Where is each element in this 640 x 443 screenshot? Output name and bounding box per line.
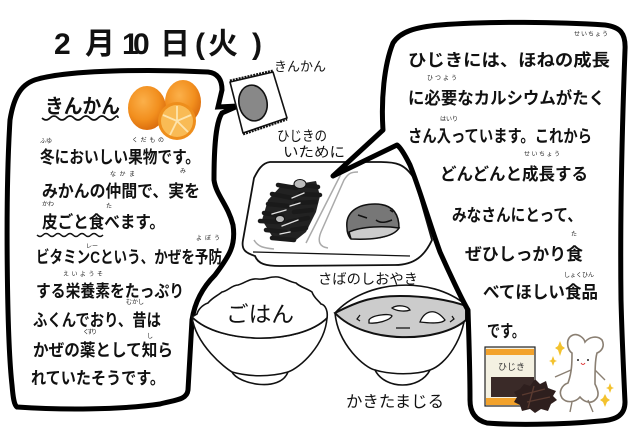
- body text: た: [106, 203, 112, 210]
- body text: せいちょう: [574, 31, 608, 38]
- body text: はいり: [440, 116, 458, 123]
- body text: くだもの: [132, 137, 164, 144]
- icon: sparkles: [549, 341, 614, 407]
- grilled mackerel: [347, 204, 399, 239]
- body text: むかし: [126, 299, 144, 306]
- body text: えいようそ: [63, 271, 103, 278]
- body text: かぜの薬として知ら: [33, 341, 173, 360]
- body text: ひじきには、ほねの成長: [408, 50, 610, 70]
- body text: ひつよう: [427, 75, 457, 82]
- body text: ぜひしっかり食: [465, 245, 583, 264]
- kumquat photo: [128, 80, 201, 140]
- tray: hijiki and grilled mackerel: [243, 162, 432, 266]
- body text: です。: [487, 322, 525, 341]
- label: hijiki no itameni: ひじきの: [277, 128, 327, 144]
- body text: レー: [86, 244, 98, 250]
- body text: ふゆ: [40, 138, 52, 145]
- body text: ビタミンCという、かぜを予防: [36, 247, 222, 267]
- icon: hijiki package: [485, 347, 557, 413]
- kumquat packet: [230, 71, 287, 134]
- label: hijiki no itameni: [277, 128, 345, 160]
- body text: ふくんでおり、昔は: [33, 311, 161, 330]
- body text: みかんの仲間で、実を: [42, 182, 200, 201]
- body text: た: [571, 231, 577, 238]
- soup bowl: [335, 285, 466, 385]
- body text: かわ: [42, 201, 54, 208]
- body text: さん入っています。これから: [408, 127, 592, 146]
- body text: よぼう: [196, 235, 220, 242]
- body text: [408, 31, 610, 341]
- speech bubble: kumquat: [7, 70, 238, 409]
- body text: に必要なカルシウムがたく: [408, 88, 605, 108]
- label: saba no shioyaki: さばのしおやき: [318, 271, 418, 287]
- body text: みなさんにとって、: [452, 206, 582, 225]
- body text: れていたそうです。: [31, 369, 165, 388]
- label: gohan: ごはん: [226, 302, 294, 327]
- body text: べてほしい食品: [483, 283, 598, 302]
- speech bubble: hijiki: [333, 22, 625, 424]
- rice bowl: [192, 277, 327, 385]
- body text: [31, 137, 222, 388]
- body text: 冬においしい果物です。: [40, 148, 200, 167]
- body text: どんどんと成長する: [440, 164, 588, 184]
- body text: み: [180, 168, 186, 175]
- body text: くすり: [83, 329, 97, 336]
- body text: なかま: [110, 171, 135, 178]
- label: kinkan: きんかん: [274, 59, 326, 74]
- body text: しょくひん: [564, 272, 594, 279]
- label: hijiki no itameni: いために: [283, 144, 345, 160]
- body text: し: [147, 333, 153, 340]
- body text: する栄養素をたっぷり: [36, 281, 184, 301]
- icon: hijiki package: ひじき: [498, 362, 525, 372]
- heading: kinkan: きんかん: [45, 95, 120, 118]
- label: kakitamajiru: かきたまじる: [346, 393, 444, 411]
- body text: 皮ごと食べます。: [42, 212, 165, 232]
- hijiki: [260, 180, 320, 240]
- title: 2月10日(火): [54, 28, 262, 61]
- body text: せいちょう: [524, 151, 560, 158]
- icon: bone character: [555, 335, 605, 412]
